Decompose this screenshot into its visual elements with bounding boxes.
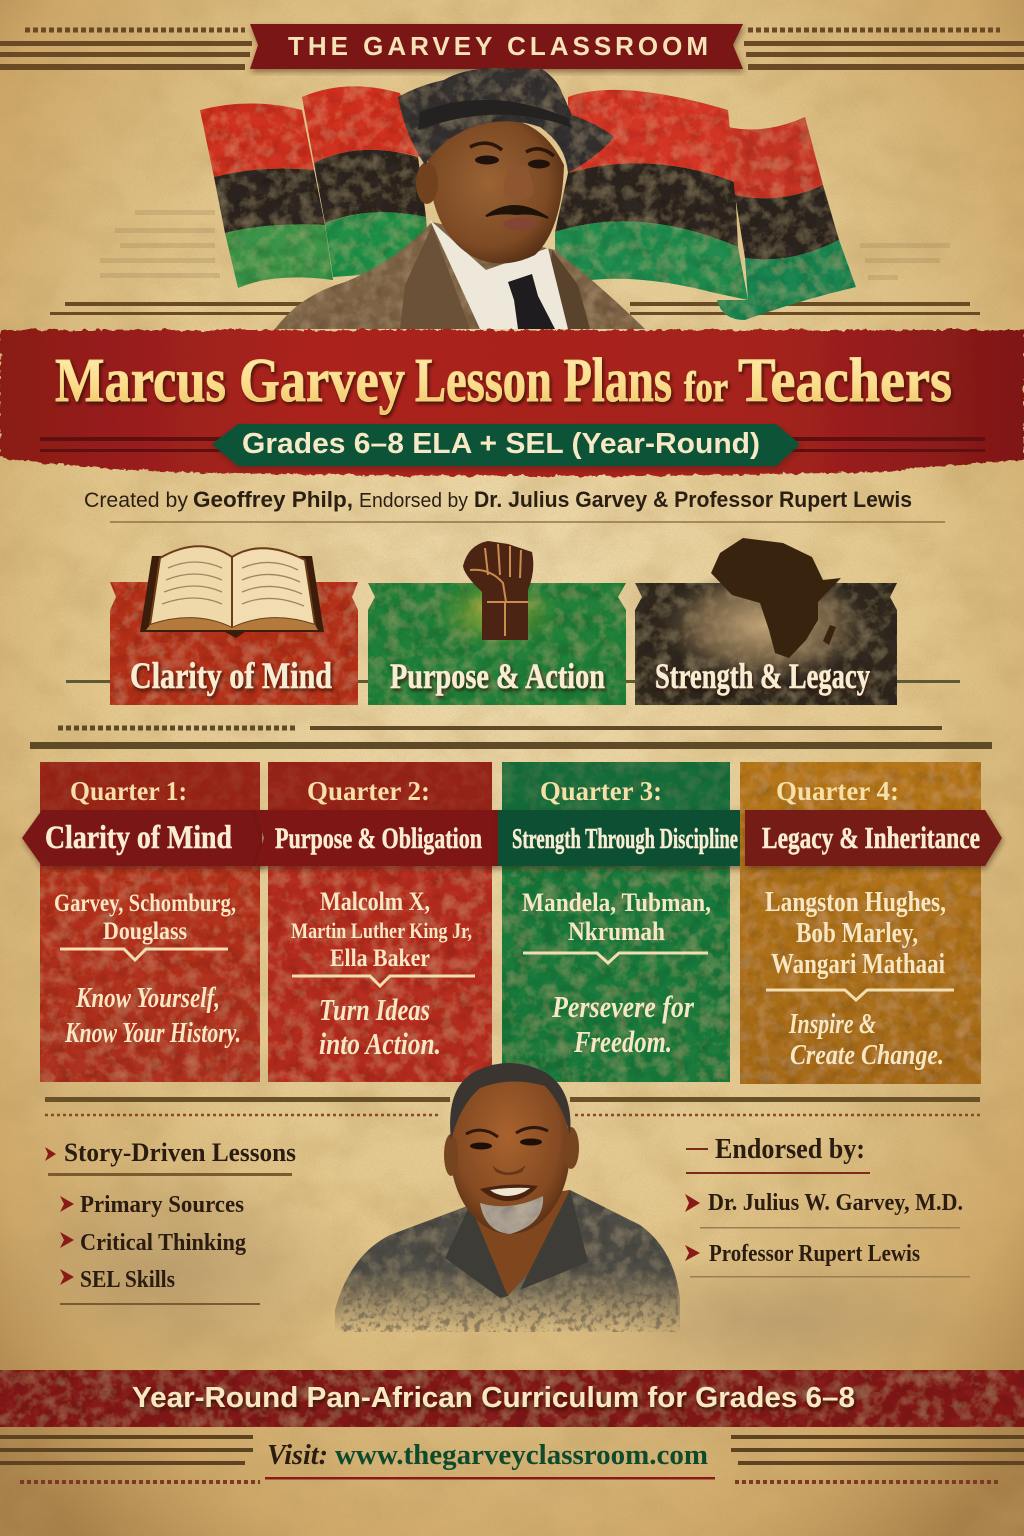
quarter 2 column: Martin Luther King Jr, — [291, 918, 472, 943]
quarter 4 column — [740, 762, 1002, 1084]
main title — [55, 347, 952, 415]
quarter 2 ribbon — [255, 810, 498, 866]
quarter 1 column — [22, 762, 262, 1082]
list: endorsed by: Dr. Julius W. Garvey, M.D. — [708, 1190, 963, 1216]
pan-African flag — [200, 86, 856, 320]
head — [428, 118, 564, 264]
footer stripes — [0, 1435, 1024, 1482]
face — [450, 1066, 570, 1234]
credit line — [84, 487, 912, 512]
top decorative stripes — [0, 30, 1024, 70]
eyes and smile — [466, 1127, 548, 1201]
shirt collar — [430, 220, 568, 329]
quarter 4 column: Wangari Mathaai — [771, 949, 945, 980]
quarter 4 ribbon — [745, 810, 1002, 866]
website link: www.thegarveyclassroom.com — [335, 1440, 708, 1471]
list: endorsed by: Endorsed by: — [715, 1134, 865, 1165]
theme cards connector line — [66, 680, 960, 683]
list: endorsed by: Professor Rupert Lewis — [709, 1241, 920, 1267]
icon: map of Africa — [711, 538, 841, 658]
credit line: Endorsed by — [359, 490, 468, 512]
quarter 3 column: Persevere for — [551, 989, 695, 1024]
hair — [450, 1063, 570, 1140]
stripes behind portrait — [50, 302, 980, 315]
quarter 4 column: Langston Hughes, — [765, 887, 946, 918]
theme card: Purpose & Action — [368, 541, 626, 705]
top banner: The Garvey Classroom: THE GARVEY CLASSROOM — [288, 31, 708, 61]
quarter 1 column: Clarity of Mind — [45, 820, 232, 856]
icon: raised fist — [463, 541, 533, 640]
theme card: Purpose & Action: Purpose & Action — [390, 656, 605, 696]
quarter 3 column — [498, 762, 745, 1082]
quarter 3 column: Nkrumah — [568, 917, 665, 946]
main title: Teachers — [738, 347, 952, 415]
subtitle ribbon — [212, 424, 800, 466]
list: story-driven lessons: Story-Driven Lessons — [64, 1138, 296, 1167]
quarter 2 column: Quarter 2: — [307, 776, 430, 806]
shirt — [335, 1190, 680, 1340]
grey beard — [480, 1196, 543, 1234]
portrait: Marcus Garvey — [275, 68, 645, 329]
icon: open book — [140, 546, 324, 638]
credit line: Dr. Julius Garvey & Professor Rupert Lewis — [474, 487, 912, 512]
main title: Lesson Plans — [415, 347, 672, 415]
main title: Marcus Garvey — [55, 347, 405, 415]
quarter 2 column: Ella Baker — [330, 945, 430, 972]
quarter 3 column: Mandela, Tubman, — [522, 888, 711, 917]
quarter 1 ribbon — [22, 810, 262, 866]
quarter 2 column: into Action. — [319, 1026, 441, 1061]
ear — [416, 162, 438, 204]
quarter 1 column: Quarter 1: — [70, 776, 187, 806]
quarter 2 column: Turn Ideas — [319, 992, 430, 1027]
list: story-driven lessons: SEL Skills — [80, 1267, 175, 1293]
footer band: Year-Round Pan-African Curriculum for Grades 6–8 — [132, 1382, 855, 1414]
list: story-driven lessons — [45, 1138, 296, 1305]
list: story-driven lessons: Critical Thinking — [80, 1230, 246, 1256]
necktie — [508, 274, 555, 329]
quarter 2 column: Purpose & Obligation — [275, 822, 482, 855]
quarter 2 column — [255, 762, 498, 1082]
theme card: Clarity of Mind — [110, 546, 358, 705]
list: endorsed by — [685, 1134, 970, 1278]
list: story-driven lessons: Primary Sources — [80, 1192, 244, 1218]
theme card: Strength & Legacy: Strength & Legacy — [655, 656, 870, 696]
quarter 4 column: Create Change. — [790, 1040, 944, 1071]
fedora hat — [398, 68, 614, 173]
portrait: Geoffrey Philp — [335, 1063, 680, 1340]
subtitle ribbon: Grades 6–8 ELA + SEL (Year-Round) — [242, 428, 760, 460]
website link — [265, 1440, 715, 1480]
main title: for — [684, 365, 728, 411]
credit line: Geoffrey Philp, — [193, 487, 353, 512]
quarter 4 column: Quarter 4: — [776, 776, 899, 806]
footer band — [0, 1370, 1024, 1427]
jacket — [275, 222, 645, 329]
quarter 3 column: Quarter 3: — [540, 776, 662, 806]
quarter 4 column: Bob Marley, — [796, 918, 918, 949]
quarter 4 column: Inspire & — [788, 1009, 876, 1040]
eyes, nose, moustache, lips — [470, 143, 554, 230]
quarter 3 column: Freedom. — [573, 1024, 672, 1059]
website link: Visit: — [267, 1440, 328, 1471]
quarter 1 column: Garvey, Schomburg, — [54, 890, 236, 917]
credit line: Created by — [84, 489, 188, 512]
lower dividers — [45, 1097, 980, 1115]
top banner: The Garvey Classroom — [250, 24, 743, 69]
faint newspaper text — [100, 210, 950, 280]
quarter 2 column: Malcolm X, — [320, 887, 430, 916]
quarter 1 column: Know Yourself, — [75, 983, 220, 1014]
quarter 3 ribbon — [498, 810, 745, 866]
title band — [0, 330, 1024, 476]
quarter 1 column: Douglass — [103, 918, 187, 945]
quarter 1 column: Know Your History. — [64, 1018, 241, 1049]
theme card: Strength & Legacy — [635, 538, 897, 705]
theme card: Clarity of Mind: Clarity of Mind — [130, 656, 332, 697]
quarter 3 column: Strength Through Discipline — [512, 823, 738, 855]
section dividers — [30, 726, 992, 749]
